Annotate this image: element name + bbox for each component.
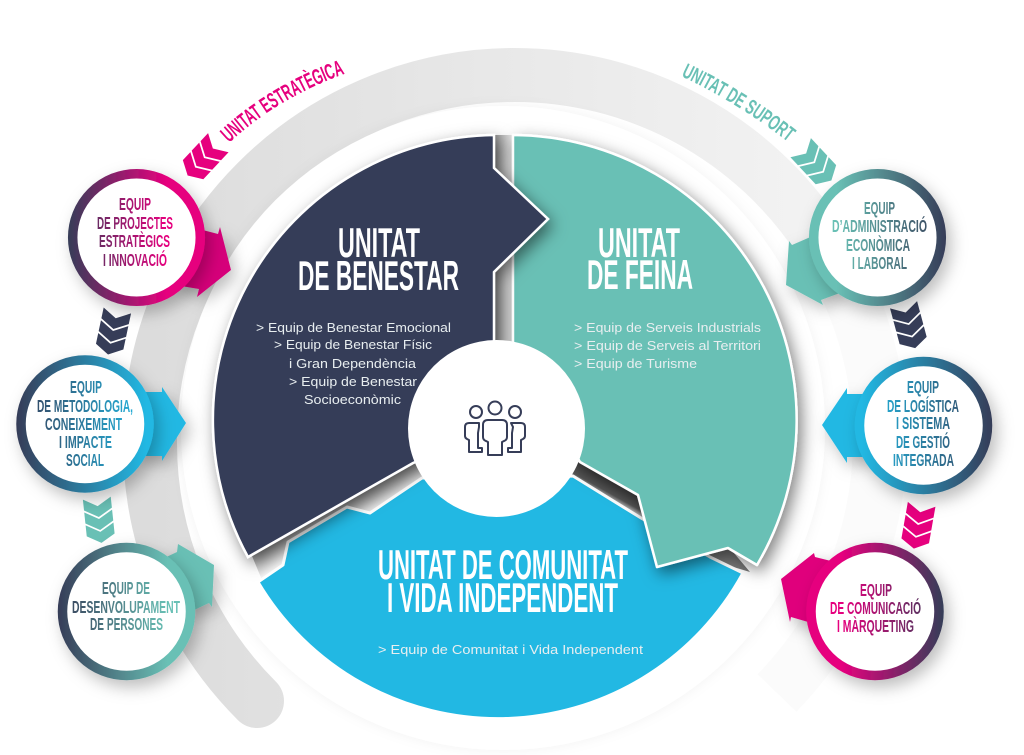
- faint right part of arc band: [777, 240, 880, 693]
- grey arc band: [150, 75, 820, 701]
- arrow: [822, 388, 870, 463]
- label: I SISTEMA: [896, 413, 950, 433]
- arrow: [175, 227, 231, 297]
- label: EQUIP: [860, 580, 892, 600]
- label: [72, 578, 180, 634]
- team list: > Equip de Benestar Físic: [274, 337, 433, 352]
- label: EQUIP: [864, 198, 895, 218]
- ring: [860, 362, 988, 490]
- heading: [298, 219, 459, 299]
- label: I LABORAL: [852, 253, 907, 273]
- team list: [256, 320, 451, 407]
- team: desenvolupament: [62, 544, 214, 676]
- heading: [378, 541, 628, 621]
- team list: [574, 320, 762, 371]
- label: EQUIP: [119, 194, 151, 214]
- label: SOCIAL: [66, 450, 104, 470]
- heading: [587, 219, 693, 298]
- white disc behind main wheel: [181, 106, 825, 750]
- team: comunicacio: [781, 548, 939, 676]
- arrow: [786, 235, 840, 305]
- label: I MÀRQUETING: [837, 615, 914, 636]
- label: ECONÒMICA: [846, 234, 910, 255]
- team list: Socioeconòmic: [304, 392, 402, 407]
- label: [887, 377, 959, 470]
- label: [37, 377, 133, 470]
- label: DE PROJECTES: [97, 213, 173, 233]
- arrow: [160, 544, 214, 612]
- team list: > Equip de Serveis al Territori: [574, 338, 761, 353]
- center circle: [408, 340, 585, 517]
- team list: > Equip de Turisme: [574, 356, 697, 371]
- ring: [811, 548, 939, 676]
- segment: unitat de benestar: [213, 135, 548, 557]
- segment: unitat de comunitat: [258, 476, 743, 719]
- label: DE COMUNICACIÓ: [830, 597, 921, 618]
- label: CONEIXEMENT: [45, 414, 122, 434]
- ring: [73, 174, 200, 301]
- team: projectes estrategics: [73, 174, 231, 301]
- team list: > Equip de Benestar: [289, 374, 418, 389]
- arrow: [140, 387, 186, 461]
- chevrons: teal top right: [790, 138, 842, 190]
- label: [830, 580, 921, 636]
- label: I INNOVACIÓ: [103, 249, 167, 270]
- label: DESENVOLUPAMENT: [72, 597, 180, 617]
- main wheel: [213, 135, 797, 719]
- team list: > Equip de Serveis Industrials: [574, 320, 762, 335]
- chevrons: pink right: [900, 502, 935, 551]
- team list: > Equip de Comunitat i Vida Independent: [378, 642, 643, 657]
- team: metodologia: [21, 360, 186, 488]
- team list: i Gran Dependència: [289, 356, 417, 371]
- text: unitat de feina: [574, 219, 762, 371]
- gap under feina tip: [655, 546, 750, 572]
- label: EQUIP: [907, 377, 939, 397]
- label: INTEGRADA: [893, 450, 954, 470]
- label: DE PERSONES: [90, 614, 163, 634]
- label: I IMPACTE: [59, 432, 112, 452]
- icon: group of people: [465, 402, 525, 455]
- chevrons: pink top left: [177, 133, 229, 185]
- ring: [62, 548, 190, 676]
- team: logistica: [822, 362, 988, 490]
- label: [97, 194, 173, 270]
- chevrons: navy right: [890, 301, 929, 352]
- chevrons: teal left: [83, 497, 115, 544]
- segment: unitat de feina: [513, 135, 797, 567]
- heading: UNITAT DE COMUNITAT: [378, 541, 628, 588]
- label: EQUIP DE: [102, 578, 150, 598]
- text: unitat de benestar: [256, 219, 459, 407]
- label: unitat estrategica: UNITAT ESTRATÈGICA: [220, 60, 345, 141]
- team: administracio: [786, 174, 941, 305]
- ring: [21, 360, 149, 488]
- chevrons: navy left: [94, 308, 131, 357]
- text: unitat de comunitat: [378, 541, 643, 657]
- label: ESTRATÈGICS: [99, 230, 170, 251]
- team list: > Equip de Benestar Emocional: [256, 320, 451, 335]
- heading: UNITAT: [338, 219, 420, 266]
- label: DE LOGÍSTICA: [887, 395, 959, 416]
- label: D’ADMINISTRACIÓ: [832, 215, 927, 236]
- heading: UNITAT: [598, 219, 680, 266]
- label: unitat de suport: UNITAT DE SUPORT: [683, 63, 797, 140]
- label: DE GESTIÓ: [896, 431, 950, 452]
- label: DE METODOLOGIA,: [37, 396, 133, 416]
- gap between feina and comunitat: [560, 455, 650, 530]
- arrow: [781, 553, 835, 624]
- heading: I VIDA INDEPENDENT: [387, 574, 618, 621]
- gap between benestar and feina: [494, 135, 515, 350]
- label: [832, 198, 927, 273]
- heading: DE FEINA: [587, 251, 693, 298]
- label: EQUIP: [70, 377, 102, 397]
- gap between benestar and comunitat: [252, 458, 430, 580]
- heading: DE BENESTAR: [298, 252, 459, 299]
- ring: [814, 174, 941, 301]
